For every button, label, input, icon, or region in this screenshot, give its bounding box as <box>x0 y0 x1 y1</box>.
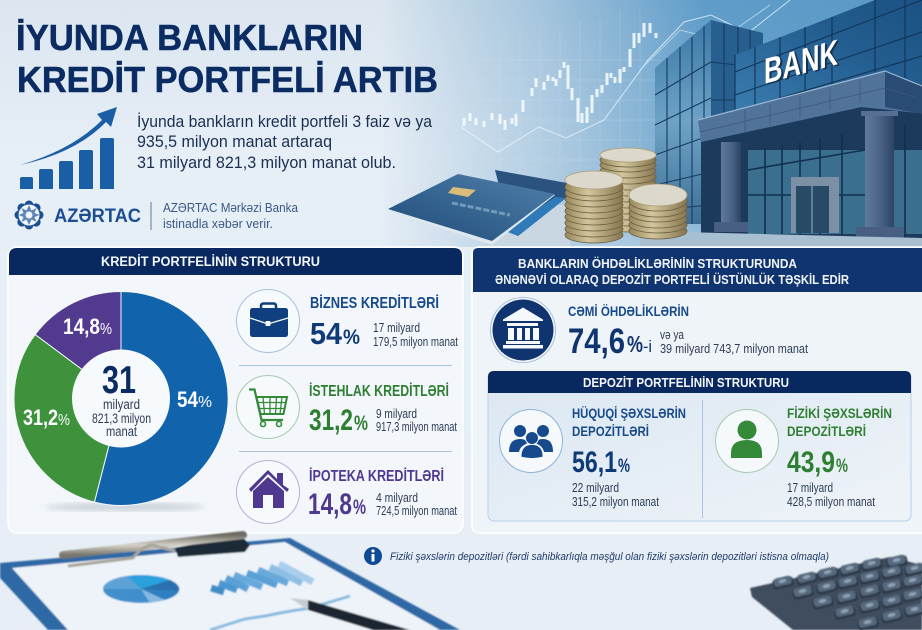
individuals deposits: 17 milyard <box>787 481 833 495</box>
individuals deposits: FİZİKİ ŞƏXSLƏRİN <box>787 405 892 421</box>
footer image: calculator <box>750 554 922 630</box>
mortgage loans row: İPOTEKA KREDİTLƏRİ <box>309 468 444 485</box>
hero image: BANK sign: BANK <box>766 33 840 93</box>
icon: growth bars with arrow <box>20 107 117 189</box>
hero image: coin stacks <box>565 148 687 243</box>
total liabilities stat <box>568 303 808 361</box>
hero image: BANK sign <box>764 32 840 93</box>
mortgage loans row: % <box>353 496 366 519</box>
legal entities deposits: DEPOZİTLƏRİ <box>572 423 649 439</box>
business loans row: 54 <box>310 316 343 351</box>
consumer loans row: İSTEHLAK KREDİTLƏRİ <box>309 383 449 400</box>
clipboard clip <box>63 535 250 566</box>
mortgage loans row <box>236 460 457 524</box>
footnote: Fiziki şəxslərin depozitləri (fərdi sahibkarlıqla məşğul olan fiziki şəxslərin depozitləri istisna olmaqla) <box>390 551 829 563</box>
panel heading <box>473 248 922 292</box>
icon: shopping cart <box>236 376 300 438</box>
consumer loans row: 917,3 milyon manat <box>376 420 457 434</box>
icon: briefcase <box>236 290 300 352</box>
donut chart: 14,8 <box>63 314 100 339</box>
total liabilities stat: və ya <box>660 328 684 342</box>
business loans row: 17 milyard <box>373 321 420 335</box>
mortgage loans row: 724,5 milyon manat <box>376 504 457 518</box>
business loans row <box>236 290 458 352</box>
total liabilities stat: % <box>627 331 643 357</box>
total liabilities stat: -i <box>643 337 652 356</box>
panel: credit portfolio structure <box>8 247 463 533</box>
business loans row: 179,5 milyon manat <box>373 335 458 349</box>
hero image: BANK sign: BANK <box>764 32 838 92</box>
individuals deposits: DEPOZİTLƏRİ <box>787 423 866 439</box>
consumer loans row: % <box>354 412 368 435</box>
intro text: İyunda bankların kredit portfeli 3 faiz və ya <box>137 112 433 131</box>
donut chart: % <box>198 394 212 411</box>
title: KREDİT PORTFELİ ARTIB <box>17 59 438 100</box>
title: İYUNDA BANKLARIN <box>16 17 363 58</box>
donut chart: milyard <box>103 397 140 412</box>
business loans row: BİZNES KREDİTLƏRİ <box>310 295 439 312</box>
consumer loans row: 9 milyard <box>376 407 417 421</box>
logo: AZƏRTAC: AZƏRTAC Mərkəzi Banka <box>163 200 299 215</box>
intro text <box>137 112 433 172</box>
total liabilities stat: 39 milyard 743,7 milyon manat <box>660 342 808 356</box>
logo: AZƏRTAC: istinadla xəbər verir. <box>163 216 273 231</box>
panel: banks' liabilities structure <box>472 247 922 533</box>
logo: AZƏRTAC <box>14 200 299 231</box>
logo: AZƏRTAC: AZƏRTAC <box>54 206 141 227</box>
sub-panel heading <box>488 371 911 393</box>
donut chart: manat <box>106 424 137 439</box>
donut chart: 31 <box>102 359 136 402</box>
intro text: 31 milyard 821,3 milyon manat olub. <box>137 153 396 172</box>
icon: person <box>716 410 778 472</box>
icon: house <box>236 460 300 524</box>
total liabilities stat: 74,6 <box>568 322 625 361</box>
intro text: 935,5 milyon manat artaraq <box>137 132 332 151</box>
donut chart: 54 <box>177 387 199 412</box>
report pie chart <box>103 575 179 603</box>
icon: logo ornament <box>14 200 44 230</box>
individuals deposits <box>716 405 892 509</box>
donut chart: 821,3 milyon <box>92 411 151 426</box>
individuals deposits: 428,5 milyon manat <box>787 495 875 509</box>
donut chart <box>14 291 228 511</box>
donut chart: % <box>100 321 112 338</box>
footer image: clipboard with report <box>0 535 460 630</box>
hero image: bank building <box>640 0 922 248</box>
footnote <box>364 547 829 565</box>
panel heading: KREDİT PORTFELİNİN STRUKTURU <box>101 254 320 269</box>
icon: bank building <box>490 298 556 362</box>
legal entities deposits: 315,2 milyon manat <box>572 495 659 509</box>
sub-panel: deposit portfolio structure <box>488 371 911 521</box>
business loans row: % <box>343 326 360 349</box>
sub-panel heading: DEPOZİT PORTFELİNİN STRUKTURU <box>583 375 789 390</box>
donut chart: % <box>58 412 70 429</box>
mortgage loans row: 4 milyard <box>376 491 418 505</box>
legal entities deposits: % <box>618 456 630 477</box>
donut chart: 31,2 <box>23 405 58 430</box>
individuals deposits: 43,9 <box>787 446 835 479</box>
panel heading <box>9 248 462 275</box>
consumer loans row <box>236 376 457 438</box>
icon: info <box>364 547 382 565</box>
panel heading: ƏNƏNƏVİ OLARAQ DEPOZİT PORTFELİ ÜSTÜNLÜK TƏŞKİL EDİR <box>495 272 849 287</box>
hero image: sky and financial chart <box>380 0 922 247</box>
icon: people group <box>500 410 562 472</box>
legal entities deposits: HÜQUQİ ŞƏXSLƏRİN <box>572 405 686 421</box>
title <box>16 17 438 100</box>
report bar chart <box>211 564 313 592</box>
legal entities deposits: 22 milyard <box>572 481 619 495</box>
panel heading: BANKLARIN ÖHDƏLİKLƏRİNİN STRUKTURUNDA <box>518 256 797 271</box>
legal entities deposits <box>500 405 686 509</box>
pen <box>290 598 410 630</box>
hero image: bank cards <box>388 170 570 247</box>
individuals deposits: % <box>836 456 848 477</box>
total liabilities stat: CƏMİ ÖHDƏLİKLƏRİN <box>568 303 689 319</box>
legal entities deposits: 56,1 <box>572 446 617 479</box>
mortgage loans row: 14,8 <box>308 488 352 521</box>
consumer loans row: 31,2 <box>309 404 353 437</box>
